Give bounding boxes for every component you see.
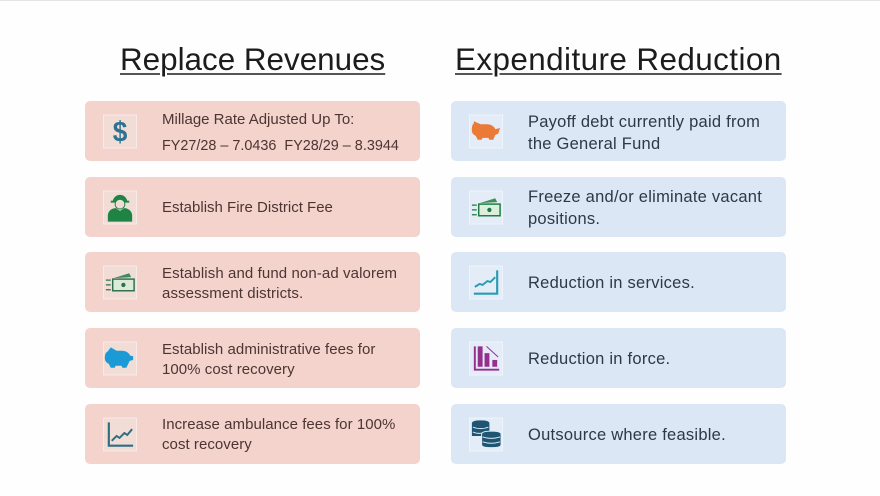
text: payoff debt [528,113,760,153]
text: fire district fee: Establish Fire District Fee [162,199,333,216]
text: freeze positions [528,188,762,228]
icon: green cash [469,190,503,224]
panel: freeze positions [451,177,786,237]
heading: Replace Revenues: Replace Revenues [120,42,385,77]
panel: outsource [451,404,786,464]
text: ambulance fees [162,416,395,452]
text: assessment districts: Establish and fund non-ad valorem [162,265,397,282]
icon: teal line chart [469,266,503,300]
icon: dollar sign: $ [113,117,127,149]
panel: millage rate [85,101,420,161]
icon: coin stacks [469,418,503,452]
text: reduction in force: Reduction in force. [528,350,670,368]
text: reduction in services: Reduction in services. [528,274,695,292]
text: administrative fees: 100% cost recovery [162,360,295,378]
icon: rising line chart [103,418,137,452]
text: payoff debt: the General Fund [528,135,660,153]
text: administrative fees [162,341,376,378]
panel: fire district fee [85,177,420,237]
icon: orange piggy bank [469,114,503,148]
panel: assessment districts [85,252,420,312]
text: assessment districts [162,265,397,302]
text: ambulance fees: Increase ambulance fees for 100% [162,416,395,433]
text: freeze positions: Freeze and/or eliminate vacant [528,188,762,206]
panel: reduction in force [451,328,786,388]
icon: firefighter [103,190,137,224]
panel: administrative fees [85,328,420,388]
icon: dollar sign [103,114,137,149]
heading: Expenditure Reduction: Expenditure Reduction [455,42,782,77]
text: administrative fees: Establish administrative fees for [162,341,375,358]
panel: payoff debt [451,101,786,161]
panel: reduction in services [451,252,786,312]
panel: ambulance fees [85,404,420,464]
text: millage rate: FY27/28 – 7.0436 FY28/29 – 8.3944 [162,138,399,154]
icon: declining bar chart [469,342,503,376]
text: freeze positions: positions. [528,210,600,228]
text: ambulance fees: cost recovery [162,436,252,452]
text: millage rate: Millage Rate Adjusted Up To: [162,111,354,128]
text: assessment districts: assessment districts. [162,284,303,302]
icon: cash [103,266,137,300]
text: payoff debt: Payoff debt currently paid from [528,113,760,131]
text: outsource: Outsource where feasible. [528,426,726,444]
text: millage rate [162,111,399,154]
icon: blue piggy bank [103,342,137,376]
